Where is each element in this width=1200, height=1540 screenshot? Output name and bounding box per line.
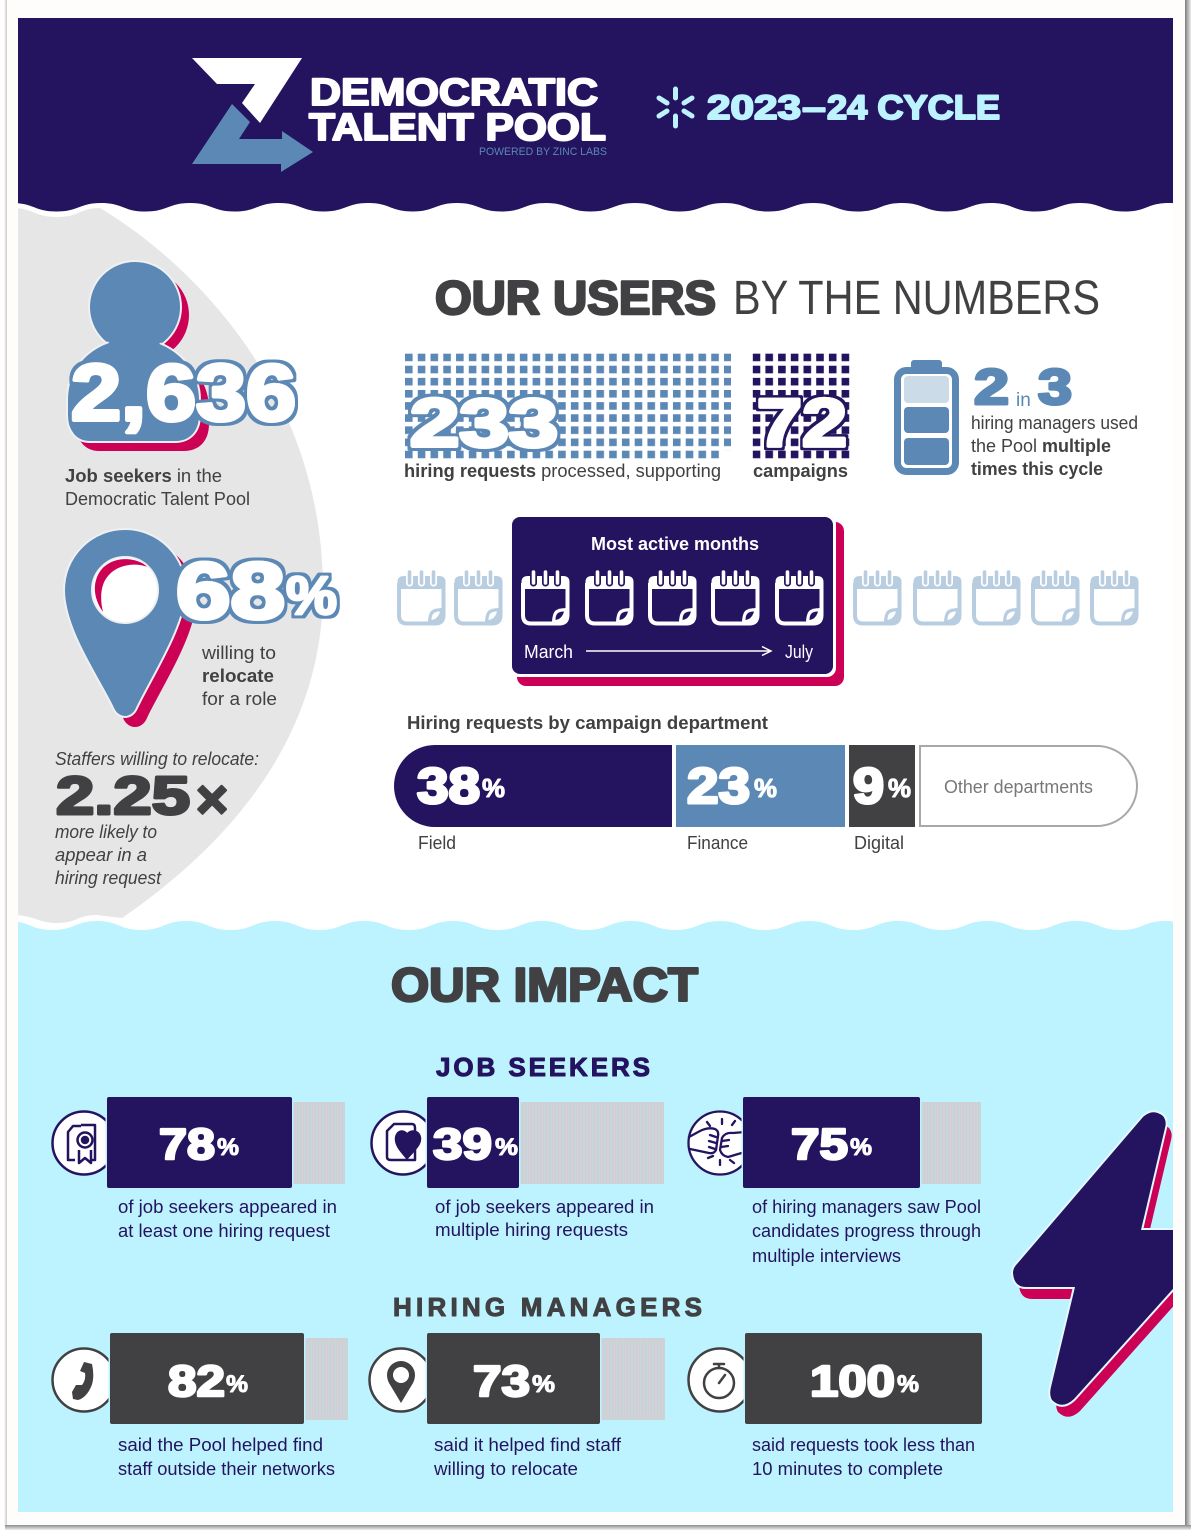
stat: willing to relocate xyxy=(64,529,337,727)
stat: staffers 2.25x: hiring request xyxy=(55,867,162,888)
number 2 in 3: in xyxy=(1016,390,1031,411)
heading: our impact: OUR IMPACT xyxy=(391,958,698,1011)
stat: 72 campaigns xyxy=(753,354,850,481)
bar xyxy=(743,1097,981,1188)
value: % xyxy=(532,1371,555,1398)
number 2 in 3: 2 xyxy=(974,359,1009,415)
number 2.25x xyxy=(56,766,228,830)
chart: request dots xyxy=(405,354,731,459)
value xyxy=(168,1357,248,1406)
stat: 2 in 3 hiring managers: times this cycle xyxy=(971,458,1103,479)
segment: digital: Digital xyxy=(854,832,904,853)
cycle label: — xyxy=(803,89,825,127)
stat: job seekers xyxy=(65,261,296,509)
icon: fist bump xyxy=(688,1112,752,1174)
segment: digital xyxy=(849,745,915,853)
segment: other departments: Other departments xyxy=(944,776,1093,797)
arrow xyxy=(586,646,771,656)
value: % xyxy=(850,1134,872,1161)
caption: said requests took less than xyxy=(752,1434,975,1455)
value: 73 xyxy=(473,1357,530,1406)
segment: digital: 9 xyxy=(853,758,884,814)
heading: our users by the numbers: BY THE NUMBERS xyxy=(733,272,1100,325)
value xyxy=(159,1120,239,1169)
heading: Hiring requests by campaign department xyxy=(407,712,768,733)
card: 75% candidates progressed: multiple interviews xyxy=(752,1245,901,1266)
value: % xyxy=(217,1134,239,1161)
value xyxy=(810,1357,919,1406)
value: % xyxy=(897,1371,919,1398)
value: % xyxy=(495,1134,518,1161)
cycle label: 24 CYCLE xyxy=(827,89,1000,127)
caption: of job seekers appeared in xyxy=(435,1196,654,1217)
segment: finance xyxy=(676,745,845,853)
stat: job seekers: Democratic Talent Pool xyxy=(65,488,250,509)
number 68%: 68 xyxy=(176,546,285,635)
panel: header band xyxy=(18,18,1173,212)
stat: 2 in 3 hiring managers: the Pool multiple xyxy=(971,435,1111,456)
card: 73% willing to relocate xyxy=(370,1333,665,1479)
segment: finance: 23 xyxy=(687,758,750,814)
panel: most active months xyxy=(510,515,844,686)
segment: field: 38 xyxy=(417,758,480,814)
icon: map pin xyxy=(64,529,196,727)
panel: grey side panel xyxy=(12,208,323,923)
heading: our users by the numbers xyxy=(435,271,1100,325)
value xyxy=(433,1120,518,1169)
number 68% xyxy=(176,546,337,635)
segment: finance: Finance xyxy=(687,832,748,853)
chart: inactive months calendars xyxy=(398,572,1138,624)
number 2.25x: 2.25 xyxy=(56,766,190,826)
value: % xyxy=(226,1371,248,1398)
card: 73% willing to relocate: willing to relocate xyxy=(433,1458,578,1479)
stat: 233 hiring requests xyxy=(404,354,731,481)
logo: POWERED BY ZINC LABS xyxy=(479,146,607,158)
card: 39% appeared in multiple requests: multiple hiring requests xyxy=(435,1219,628,1240)
heading: our users by the numbers: OUR USERS xyxy=(435,271,716,324)
label: July: July xyxy=(785,641,814,662)
icon: phone xyxy=(52,1348,116,1412)
heading: hiring managers: HIRING MANAGERS xyxy=(393,1292,702,1322)
card: 39% appeared in multiple requests xyxy=(372,1097,664,1240)
card: 100% under 10 minutes xyxy=(688,1333,982,1479)
caption: hiring managers used xyxy=(971,412,1138,433)
heading: job seekers: JOB SEEKERS xyxy=(436,1052,650,1082)
stat: staffers 2.25x: Staffers willing to relocate: xyxy=(55,748,259,769)
number 2,636: 2,636 xyxy=(71,348,296,437)
caption: willing to xyxy=(201,642,276,663)
segment: digital: % xyxy=(888,773,911,803)
card: 75% candidates progressed: candidates progress through xyxy=(752,1220,981,1241)
bar xyxy=(107,1097,345,1188)
caption: hiring requests processed, supporting xyxy=(404,460,721,481)
value: 78 xyxy=(159,1120,215,1169)
logo xyxy=(192,58,607,172)
chart: hiring requests by department xyxy=(394,712,1137,853)
card: 75% candidates progressed xyxy=(688,1097,981,1266)
heading: Most active months xyxy=(591,533,759,554)
caption: said the Pool helped find xyxy=(118,1434,323,1455)
panel: our impact background xyxy=(8,921,1200,1540)
icon: pin xyxy=(370,1348,432,1412)
segment: field: Field xyxy=(418,832,456,853)
segment: field: % xyxy=(482,773,505,803)
caption: said it helped find staff xyxy=(434,1434,622,1455)
value: 82 xyxy=(168,1357,225,1406)
icon: battery xyxy=(898,360,956,472)
number 2.25x: × xyxy=(196,768,228,830)
cycle label xyxy=(707,94,1000,120)
icon: lightning bolt xyxy=(1013,1112,1190,1417)
chart: campaign dots xyxy=(753,354,850,459)
card: 100% under 10 minutes: 10 minutes to complete xyxy=(752,1458,943,1479)
caption: Job seekers in the xyxy=(65,465,222,486)
bar xyxy=(745,1333,982,1424)
stat: staffers 2.25x: more likely to xyxy=(55,821,157,842)
logo: DEMOCRATIC xyxy=(310,72,598,114)
number 233: 233 xyxy=(410,385,558,461)
stat: staffers 2.25x xyxy=(55,748,259,888)
number 2 in 3 xyxy=(974,359,1072,415)
logo: TALENT POOL xyxy=(309,107,606,149)
value: 39 xyxy=(433,1120,492,1169)
stat: willing to relocate: for a role xyxy=(202,688,277,709)
stat: 2 in 3 hiring managers xyxy=(898,359,1138,479)
bar xyxy=(110,1333,348,1424)
caption: of hiring managers saw Pool xyxy=(752,1196,981,1217)
card: 82% outside networks: staff outside their networks xyxy=(118,1458,335,1479)
icon: person xyxy=(67,261,209,451)
card: 82% outside networks xyxy=(52,1333,348,1479)
caption: campaigns xyxy=(753,460,848,481)
value: 100 xyxy=(810,1357,895,1406)
caption: of job seekers appeared in xyxy=(118,1196,337,1217)
icon: certificate xyxy=(52,1112,116,1174)
cycle label: 2023 xyxy=(707,89,801,127)
stat: willing to relocate: relocate xyxy=(202,665,274,686)
calendars xyxy=(522,572,824,624)
value xyxy=(473,1357,555,1406)
value xyxy=(791,1120,872,1169)
segment: field xyxy=(394,745,672,853)
card: 78% appeared in at least one request: at least one hiring request xyxy=(118,1220,330,1241)
number 68%: % xyxy=(286,566,337,626)
label: March: March xyxy=(524,641,573,662)
value: 75 xyxy=(791,1120,848,1169)
bar xyxy=(427,1097,664,1188)
bar xyxy=(427,1333,665,1424)
number 2 in 3: 3 xyxy=(1038,359,1072,415)
segment: finance: % xyxy=(754,773,777,803)
card: 78% appeared in at least one request xyxy=(52,1097,345,1241)
icon: stopwatch xyxy=(688,1348,752,1412)
icon: spark xyxy=(659,89,692,126)
segment: other departments xyxy=(920,746,1137,826)
icon: document heart xyxy=(372,1112,434,1174)
stat: staffers 2.25x: appear in a xyxy=(55,844,147,865)
number 72: 72 xyxy=(757,385,847,461)
